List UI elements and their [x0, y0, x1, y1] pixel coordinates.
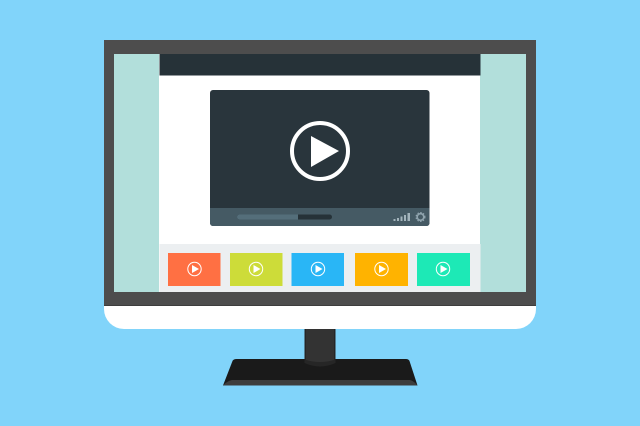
progress fill	[237, 214, 298, 220]
player control bar	[210, 208, 430, 226]
thumbnail: teal	[417, 253, 470, 286]
stand neck	[304, 329, 336, 366]
icon: main play button	[292, 123, 348, 179]
video player	[210, 90, 430, 226]
left sidebar	[114, 54, 159, 292]
monitor stand	[223, 329, 418, 386]
stand base	[223, 359, 418, 386]
thumbnail: lime	[230, 253, 282, 286]
icon: settings gear	[416, 213, 425, 221]
video area	[210, 90, 430, 226]
thumbnail strip	[160, 244, 480, 292]
monitor chin	[104, 306, 536, 329]
icon: signal bars	[394, 213, 410, 221]
progress track	[237, 214, 332, 220]
top navigation bar	[160, 54, 480, 76]
thumbnail: amber	[355, 253, 408, 286]
thumbnail: blue	[292, 253, 344, 286]
screen	[114, 54, 526, 292]
base front bevel	[223, 380, 418, 386]
right sidebar	[480, 54, 526, 292]
thumbnail: orange-red	[168, 253, 220, 286]
monitor body	[104, 40, 536, 329]
monitor bezel	[104, 40, 536, 306]
